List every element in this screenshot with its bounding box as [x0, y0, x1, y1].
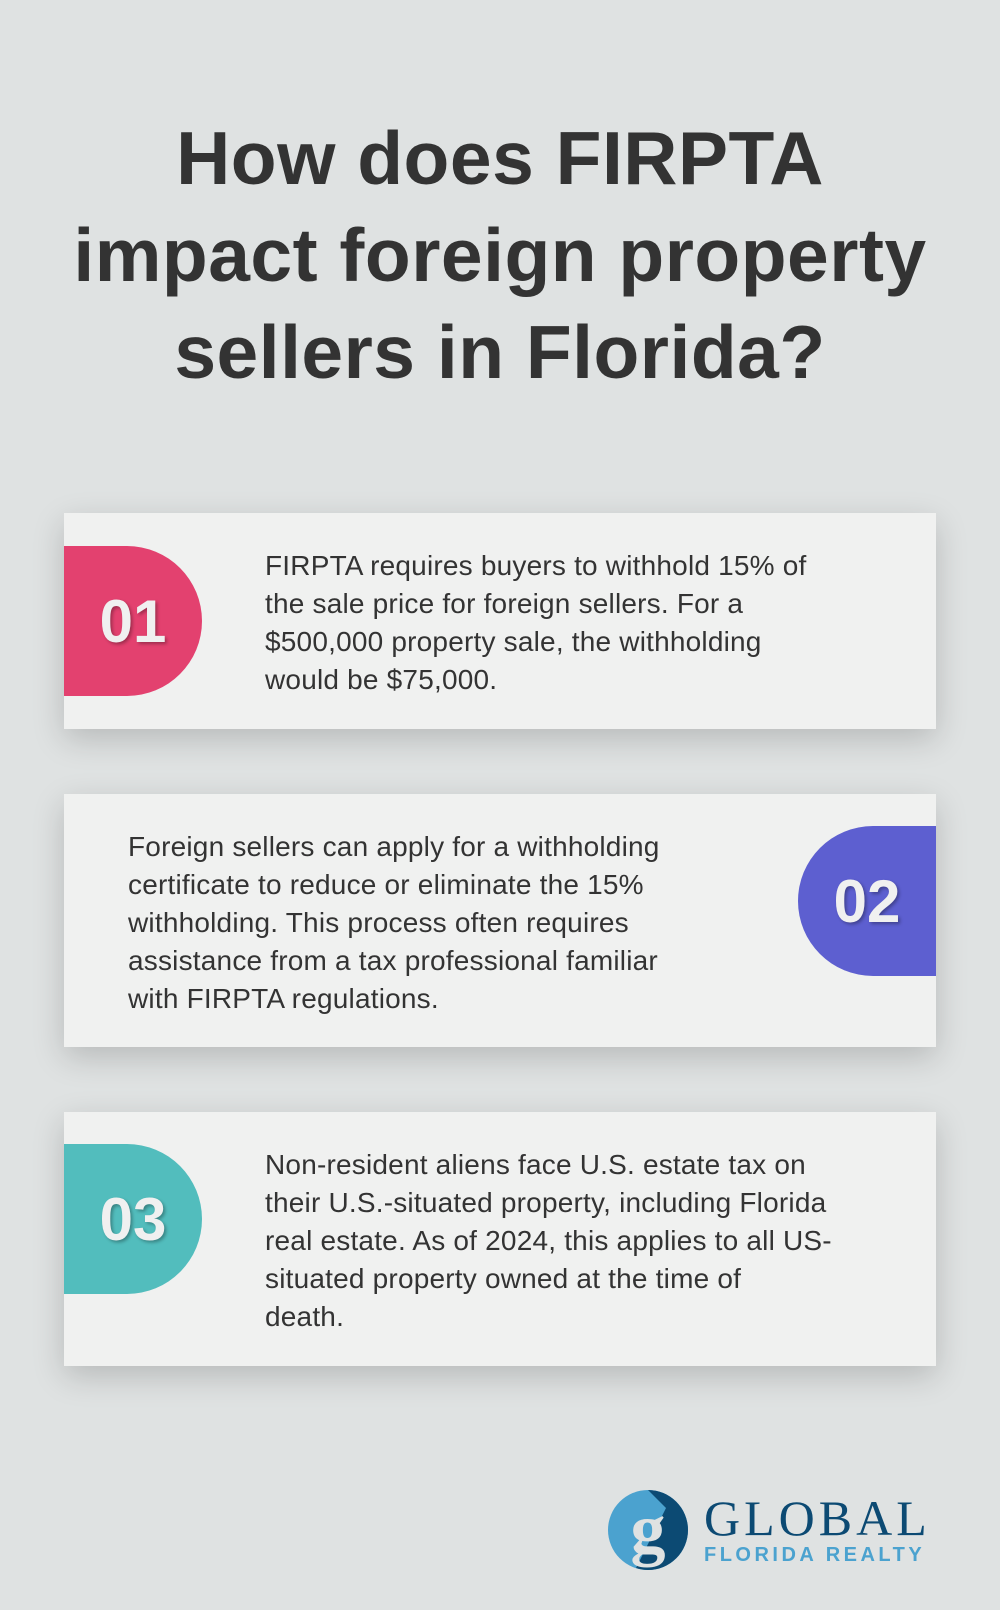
text 3: [265, 1149, 832, 1332]
text 2: with FIRPTA regulations.: [128, 983, 439, 1014]
panel: card 2: [64, 794, 936, 1047]
text 2: Foreign sellers can apply for a withholding: [128, 831, 660, 862]
badge 01: 01: [100, 588, 166, 654]
text 3: death.: [265, 1301, 344, 1332]
text 1: the sale price for foreign sellers. For a: [265, 588, 743, 619]
badge 02: 02: [834, 868, 900, 934]
logo: FLORIDA REALTY: [704, 1544, 925, 1566]
logo text: GLOBAL: [704, 1490, 931, 1546]
text 3: real estate. As of 2024, this applies to all US-: [265, 1225, 832, 1256]
text 3: situated property owned at the time of: [265, 1263, 741, 1294]
text 1: $500,000 property sale, the withholding: [265, 626, 762, 657]
badge 03: 03: [100, 1186, 166, 1252]
panel: card 1: [64, 513, 936, 729]
title: [73, 116, 927, 394]
icon: globe g: [608, 1490, 688, 1570]
badge 01: [64, 546, 202, 696]
text 1: would be $75,000.: [265, 664, 497, 695]
badge 02: [798, 826, 936, 976]
text 3: their U.S.-situated property, including Florida: [265, 1187, 826, 1218]
text 2: certificate to reduce or eliminate the 15%: [128, 869, 644, 900]
text 3: Non-resident aliens face U.S. estate tax on: [265, 1149, 806, 1180]
badge 03: [64, 1144, 202, 1294]
text 2: [128, 831, 660, 1014]
panel: card 3: [64, 1112, 936, 1366]
text 1: FIRPTA requires buyers to withhold 15% of: [265, 550, 806, 581]
title: impact foreign property: [73, 213, 927, 297]
title: How does FIRPTA: [176, 116, 824, 200]
icon: globe g: g: [630, 1491, 666, 1568]
logo: [608, 1490, 931, 1570]
title: sellers in Florida?: [174, 310, 826, 394]
text 2: withholding. This process often requires: [128, 907, 629, 938]
text 2: assistance from a tax professional familiar: [128, 945, 658, 976]
text 1: [265, 550, 806, 695]
